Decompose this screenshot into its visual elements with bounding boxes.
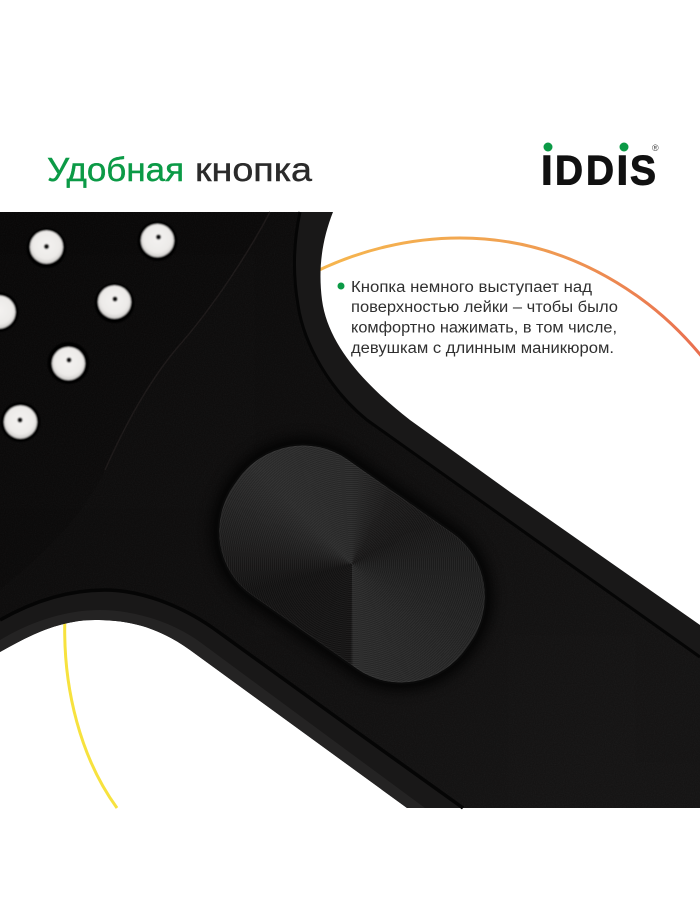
yellow arc line (65, 615, 117, 808)
logo: IDDIS: I (541, 146, 553, 194)
callout text: девушкам с длинным маникюром. (351, 340, 614, 357)
title: кнопка (195, 151, 313, 188)
shower button (188, 415, 516, 713)
callout text: поверхностью лейки – чтобы было (351, 299, 618, 316)
orange arc line (315, 238, 700, 358)
shower head photo (0, 212, 700, 810)
shower head body (0, 212, 700, 808)
logo: IDDIS: I (616, 146, 628, 194)
logo: IDDIS (541, 142, 659, 194)
spray nozzles (0, 221, 178, 442)
logo: IDDIS: ® (652, 143, 659, 153)
logo: IDDIS: S (630, 146, 656, 194)
callout text (338, 279, 618, 357)
callout text: комфортно нажимать, в том числе, (351, 320, 617, 336)
logo: IDDIS: D (555, 146, 583, 194)
logo: IDDIS: D (586, 146, 614, 194)
title: Удобная (47, 151, 184, 188)
callout text: Кнопка немного выступает над (351, 279, 592, 296)
